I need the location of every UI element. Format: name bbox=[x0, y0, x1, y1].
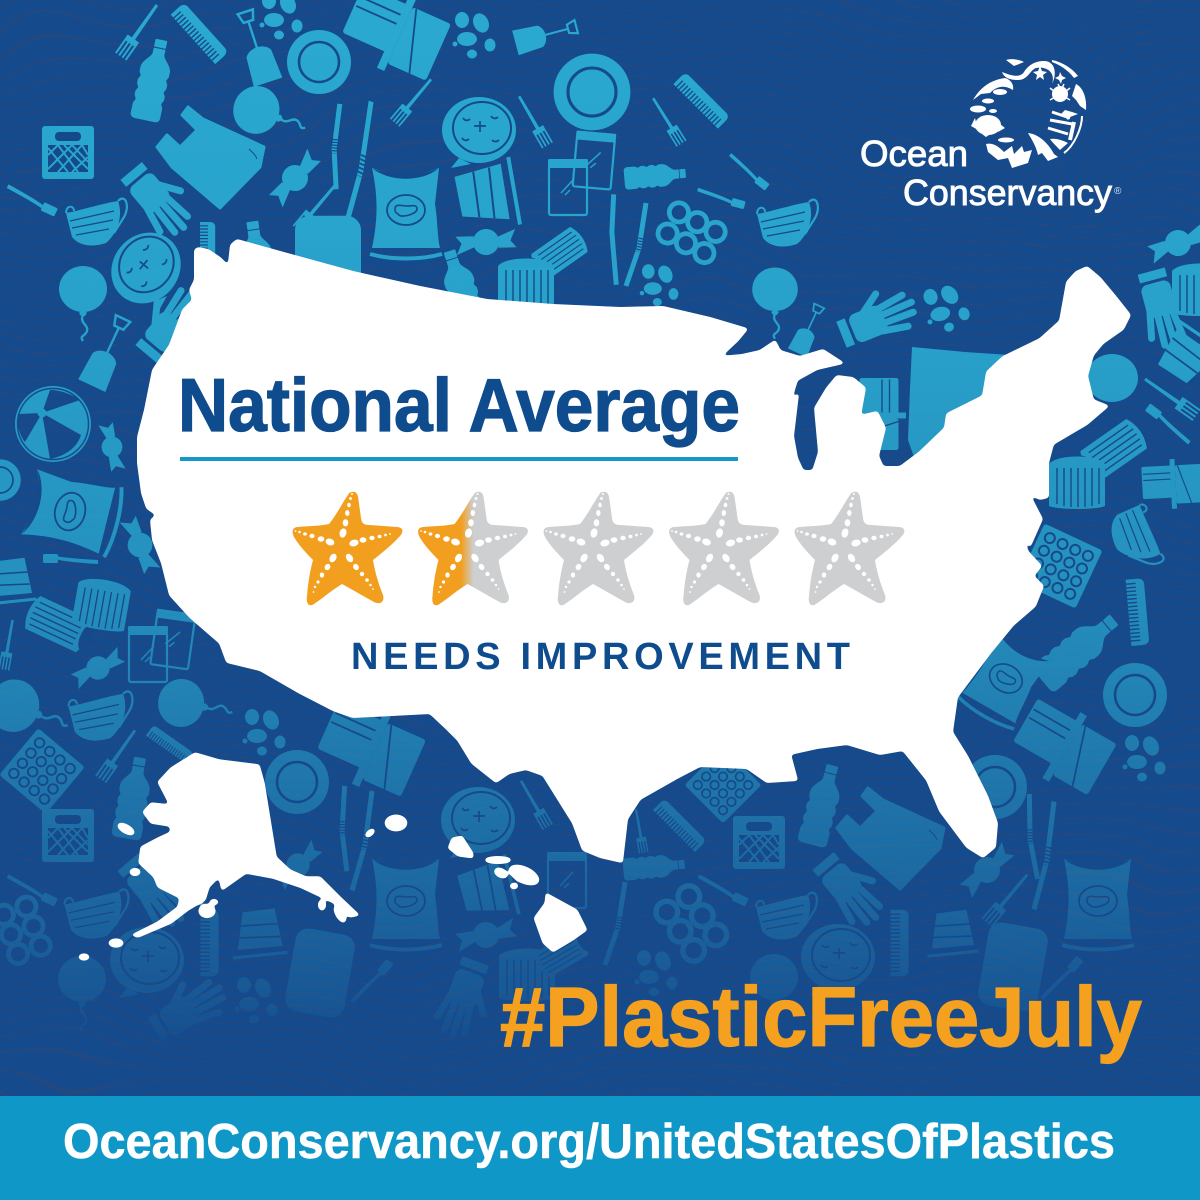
icon: glove bbox=[115, 846, 197, 932]
icon: tall bag bbox=[283, 926, 357, 1020]
icon: can bbox=[498, 258, 554, 311]
icon: chip bag bbox=[21, 466, 126, 558]
icon: lid bbox=[110, 927, 184, 998]
icon: six-pack rings bbox=[655, 199, 729, 266]
icon: jar bbox=[548, 159, 588, 215]
icon: comb bbox=[200, 910, 219, 976]
icon: glove bbox=[142, 970, 230, 1045]
icon: fork bbox=[95, 727, 140, 783]
icon: comb bbox=[890, 910, 909, 976]
icon: toothbrush bbox=[4, 184, 58, 217]
icon: straw bbox=[345, 99, 371, 230]
icon: lid bbox=[442, 97, 516, 168]
icon: net bbox=[0, 728, 85, 814]
icon: glove bbox=[127, 279, 209, 365]
icon: straw bbox=[352, 791, 372, 891]
icon: jar bbox=[572, 130, 616, 190]
icon: can bbox=[71, 575, 132, 634]
icon: cap bbox=[1073, 416, 1151, 486]
icon: comb bbox=[171, 3, 229, 64]
icon: mask bbox=[66, 199, 127, 245]
map: Hawaii bbox=[364, 815, 587, 952]
icon: fork bbox=[115, 4, 158, 60]
icon: grey starfish bbox=[544, 492, 653, 605]
icon: glove bbox=[810, 845, 892, 931]
icon: shovel bbox=[512, 14, 579, 55]
icon: plate bbox=[287, 30, 351, 94]
icon: balloon bbox=[0, 672, 77, 750]
icon: plate bbox=[1103, 663, 1167, 727]
map: Alaska bbox=[79, 753, 359, 960]
icon: tall bag bbox=[976, 920, 1050, 1014]
icon: can bbox=[295, 216, 361, 308]
icon: candy bbox=[1145, 222, 1200, 264]
icon: toothbrush bbox=[350, 958, 393, 1007]
icon: balloon bbox=[58, 956, 106, 1031]
icon: toothbrush bbox=[1040, 955, 1083, 1004]
icon: mask bbox=[757, 200, 818, 246]
icon: bottle bbox=[237, 219, 279, 305]
icon: candy bbox=[455, 918, 517, 952]
rating label: NEEDS IMPROVEMENT bbox=[351, 636, 850, 678]
icon: large plastic bag bbox=[908, 347, 1010, 460]
icon: comb bbox=[146, 725, 194, 764]
icon: container bbox=[310, 692, 430, 804]
icon: candy bbox=[67, 646, 129, 690]
icon: bottle bbox=[623, 162, 687, 190]
logo wordmark: Conservancy: Conservancy bbox=[903, 172, 1112, 213]
icon: bottle bbox=[1031, 606, 1125, 694]
icon: plate bbox=[963, 755, 1027, 819]
icon: comb bbox=[673, 72, 730, 129]
icon: fork bbox=[631, 808, 648, 854]
icon: balloon bbox=[752, 267, 798, 339]
icon: stones bbox=[452, 11, 496, 58]
icon: bottle bbox=[130, 38, 170, 122]
icon: stones bbox=[919, 279, 973, 337]
icon: bottle bbox=[622, 853, 686, 881]
icon: balloon bbox=[750, 954, 798, 1029]
icon: shovel bbox=[78, 312, 137, 392]
icon: stones bbox=[1122, 734, 1166, 782]
icon: cup bbox=[1148, 315, 1200, 393]
icon: chip bag bbox=[1062, 859, 1134, 950]
icon: can bbox=[1172, 264, 1200, 316]
icon: net bbox=[1017, 523, 1103, 609]
heading underline bbox=[180, 457, 738, 461]
icon: stones bbox=[640, 263, 678, 306]
icon: candy bbox=[266, 838, 330, 892]
icon: candy bbox=[269, 148, 321, 208]
icon: fork bbox=[0, 619, 18, 671]
icon: straw bbox=[327, 786, 364, 871]
icon: chip bag bbox=[370, 168, 442, 258]
icon: comb bbox=[1126, 578, 1149, 646]
logo: Ocean Conservancy bbox=[860, 59, 1122, 213]
map: United States bbox=[79, 240, 1130, 960]
icon: grey starfish bbox=[669, 492, 779, 605]
icon: bottle bbox=[435, 246, 489, 334]
icon: net bbox=[685, 747, 761, 823]
icon: container bbox=[846, 378, 906, 450]
icon: cup bbox=[455, 854, 519, 922]
icon: toothbrush bbox=[43, 554, 98, 564]
icon: mask bbox=[1108, 502, 1164, 570]
icon: fork bbox=[1141, 373, 1200, 421]
icon: straw bbox=[605, 882, 625, 965]
icon: toothbrush bbox=[4, 874, 58, 907]
icon: mask bbox=[756, 893, 817, 939]
icon: chip bag bbox=[956, 630, 1053, 732]
icon: candy bbox=[456, 229, 516, 255]
icon: stones bbox=[234, 976, 278, 1024]
icon: fork bbox=[516, 778, 553, 830]
hashtag: #PlasticFreeJuly bbox=[500, 970, 1142, 1064]
icon: cup bbox=[0, 558, 36, 604]
icon: round lid bbox=[1086, 354, 1138, 402]
icon: glove bbox=[433, 955, 499, 1042]
icon: cup bbox=[453, 157, 520, 229]
icon: fork bbox=[652, 98, 686, 147]
icon: bottle bbox=[111, 755, 155, 841]
icon: fork bbox=[518, 96, 553, 148]
icon: six-pack rings bbox=[0, 894, 53, 966]
icon: fork bbox=[981, 870, 1033, 927]
icon: stones bbox=[260, 0, 302, 40]
icon: mask bbox=[68, 691, 132, 741]
icon: lid bbox=[801, 924, 875, 995]
icon: can bbox=[499, 948, 555, 1001]
logo emblem: ring of sea creatures bbox=[970, 59, 1086, 168]
icon: glove bbox=[1135, 265, 1195, 350]
icon: container bbox=[1005, 690, 1121, 802]
icon: cap bbox=[531, 227, 588, 276]
icon: straw bbox=[626, 203, 646, 286]
icon: lid bbox=[441, 787, 515, 858]
logo wordmark: Ocean: Ocean bbox=[860, 133, 968, 174]
icon: candy bbox=[952, 840, 1022, 900]
icon: glove bbox=[832, 283, 919, 350]
icon: shovel bbox=[788, 301, 829, 357]
star rating: 1.5 of 5 starfish bbox=[293, 492, 904, 605]
icon: candy bbox=[98, 422, 126, 472]
icon: stones bbox=[634, 949, 678, 996]
icon: plastic bag bbox=[837, 788, 944, 889]
icon: shovel bbox=[231, 7, 282, 87]
map: contiguous United States bbox=[138, 240, 1130, 862]
icon: comb bbox=[653, 799, 706, 852]
icon: fork bbox=[390, 78, 432, 127]
icon: stones bbox=[242, 708, 286, 756]
icon: balloon bbox=[154, 675, 236, 736]
icon: fork bbox=[292, 185, 334, 227]
icon: straw bbox=[1034, 802, 1054, 909]
icon: jar bbox=[128, 626, 168, 682]
icon: balloon bbox=[233, 86, 306, 134]
icon: toothbrush bbox=[695, 874, 749, 907]
icon: six-pack rings bbox=[652, 882, 731, 965]
icon: toothbrush bbox=[696, 188, 746, 209]
icon: cup bbox=[928, 910, 978, 956]
footer URL: OceanConservancy.org/UnitedStatesOfPlastics bbox=[63, 1115, 1115, 1169]
icon: cap bbox=[532, 927, 594, 979]
icon: candy bbox=[119, 513, 161, 577]
icon: straw bbox=[1018, 794, 1049, 879]
icon: straw bbox=[332, 104, 342, 190]
icon: lid bbox=[97, 218, 199, 321]
icon: plate bbox=[0, 459, 21, 501]
icon: mask bbox=[64, 889, 128, 939]
icon: plate bbox=[265, 750, 329, 814]
icon: glove bbox=[120, 162, 191, 236]
icon: crate bbox=[42, 809, 94, 862]
heading: National Average: National Average bbox=[178, 363, 740, 447]
footer band bbox=[0, 1096, 1200, 1200]
icon: bottle bbox=[797, 762, 847, 848]
icon: container bbox=[1141, 458, 1200, 510]
icon: plastic bag bbox=[157, 107, 264, 208]
icon: half orange starfish bbox=[418, 492, 528, 605]
icon: jar bbox=[149, 608, 197, 670]
icon: comb bbox=[200, 222, 215, 278]
icon: crate bbox=[42, 126, 94, 179]
icon: full orange starfish bbox=[293, 492, 402, 605]
icon: plate bbox=[554, 54, 630, 130]
icon: cup bbox=[233, 908, 287, 958]
icon: crate bbox=[733, 816, 785, 869]
icon: grey starfish bbox=[795, 492, 904, 605]
icon: beach ball bbox=[15, 386, 91, 462]
icon: can bbox=[1049, 456, 1105, 509]
icon: straw bbox=[609, 194, 619, 285]
icon: jar bbox=[547, 852, 587, 908]
registered mark: ® bbox=[1114, 186, 1122, 197]
icon: container bbox=[343, 0, 450, 80]
icon: chip bag bbox=[370, 859, 442, 950]
icon: balloon bbox=[59, 266, 107, 341]
icon: toothbrush bbox=[1144, 403, 1194, 444]
icon: toothbrush bbox=[726, 153, 770, 191]
icon: cap bbox=[21, 594, 99, 656]
